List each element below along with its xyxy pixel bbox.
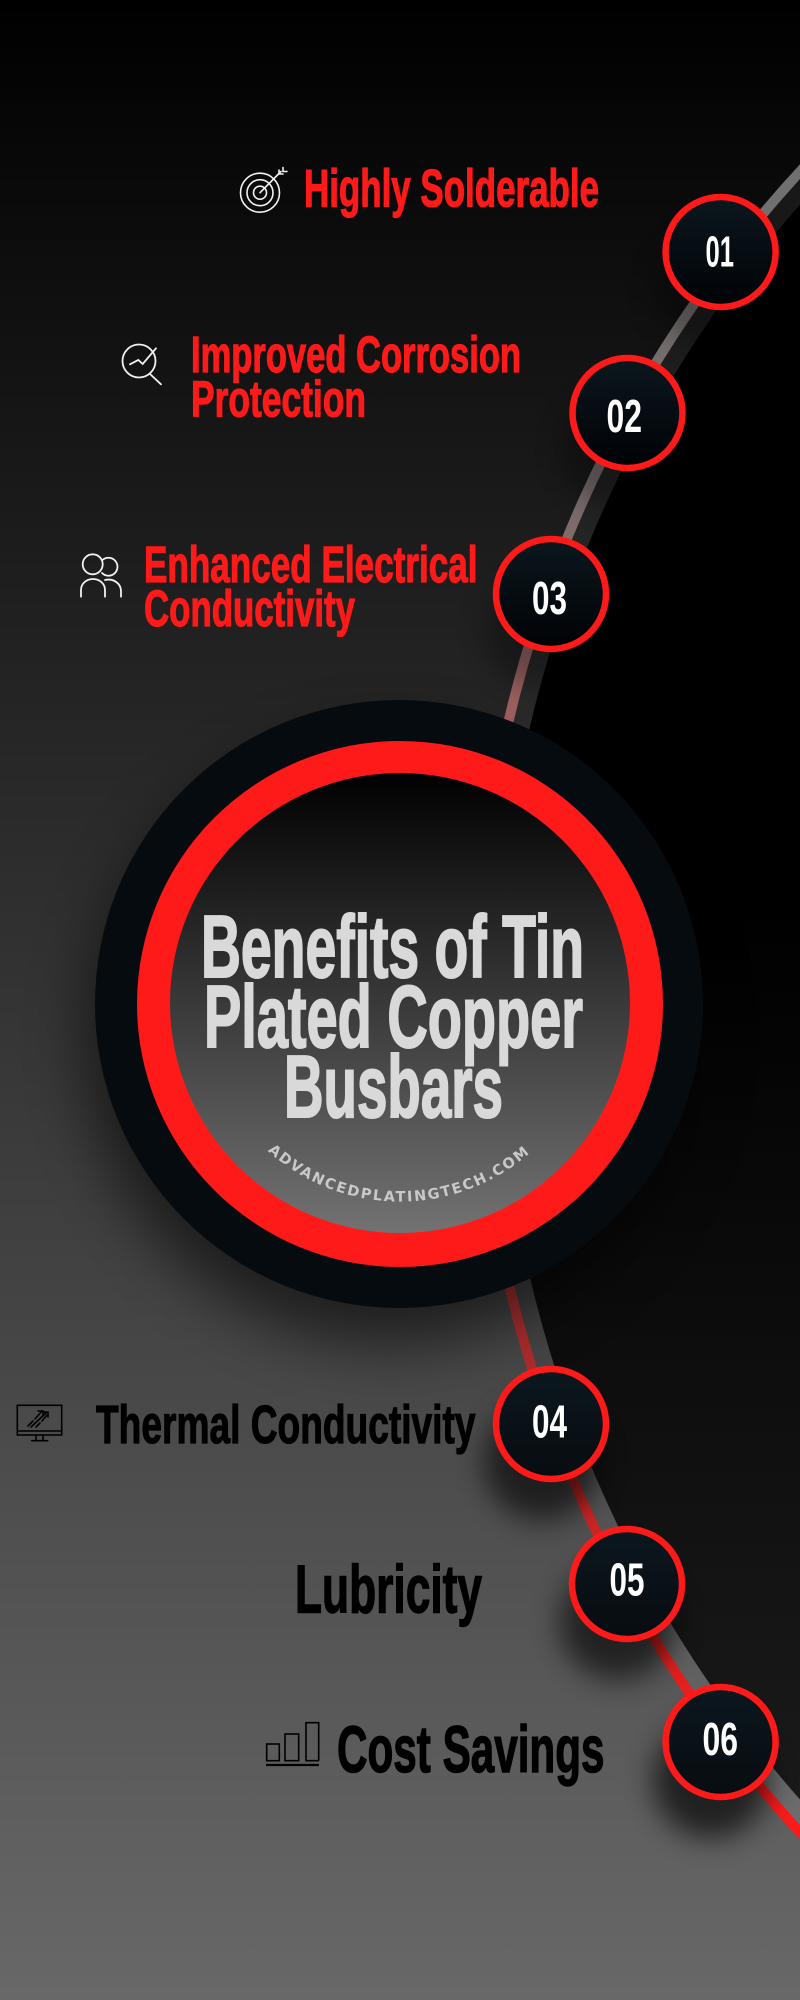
- number badge 05: 05: [610, 1554, 644, 1606]
- heading: lubricity: Lubricity: [295, 1552, 482, 1628]
- step 02: [122, 326, 682, 509]
- heading: thermal conductivity: Thermal Conductivity: [96, 1395, 476, 1455]
- heading: enhanced electrical conductivity: Enhanced Electrical: [144, 536, 478, 593]
- step 06: [266, 1687, 776, 1838]
- number badge 04: 04: [532, 1396, 567, 1448]
- icon: bar chart: [266, 1723, 319, 1765]
- number badge 02: 02: [606, 390, 642, 442]
- number badge 01: 01: [706, 228, 734, 276]
- number badge 05: [560, 1529, 682, 1680]
- step 05: [295, 1529, 682, 1680]
- icon: people: [81, 554, 121, 597]
- central title badge: [69, 700, 703, 1366]
- curved timeline: red line, grey band and black region: [471, 164, 800, 1840]
- icon: monitor with arrows: [17, 1405, 62, 1441]
- number badge 03: [485, 539, 606, 690]
- heading: enhanced electrical conductivity: Conductivity: [144, 580, 355, 637]
- heading: improved corrosion protection: Improved Corrosion: [191, 326, 521, 383]
- heading: highly solderable: Highly Solderable: [304, 160, 599, 218]
- step 01: [240, 160, 776, 348]
- number badge 03: 03: [532, 572, 567, 624]
- number badge 04: [484, 1369, 606, 1520]
- heading: enhanced electrical conductivity: [144, 536, 478, 637]
- number badge 01: [654, 197, 776, 348]
- main title: [201, 897, 584, 1136]
- step 03: [81, 536, 606, 690]
- main title: Busbars: [284, 1037, 503, 1136]
- heading: cost savings: Cost Savings: [337, 1712, 604, 1786]
- number badge 02: [561, 358, 682, 509]
- icon: target: [240, 168, 287, 212]
- main title: Benefits of Tin: [201, 897, 584, 996]
- heading: improved corrosion protection: Protection: [191, 370, 366, 428]
- number badge 06: [653, 1687, 776, 1838]
- icon: magnifier chart: [122, 344, 161, 384]
- step 04: [17, 1369, 606, 1520]
- heading: improved corrosion protection: [191, 326, 521, 428]
- website label on curve: ADVANCEDPLATINGTECH.COM: [268, 1145, 528, 1202]
- main title: Plated Copper: [204, 967, 583, 1066]
- number badge 06: 06: [702, 1713, 738, 1765]
